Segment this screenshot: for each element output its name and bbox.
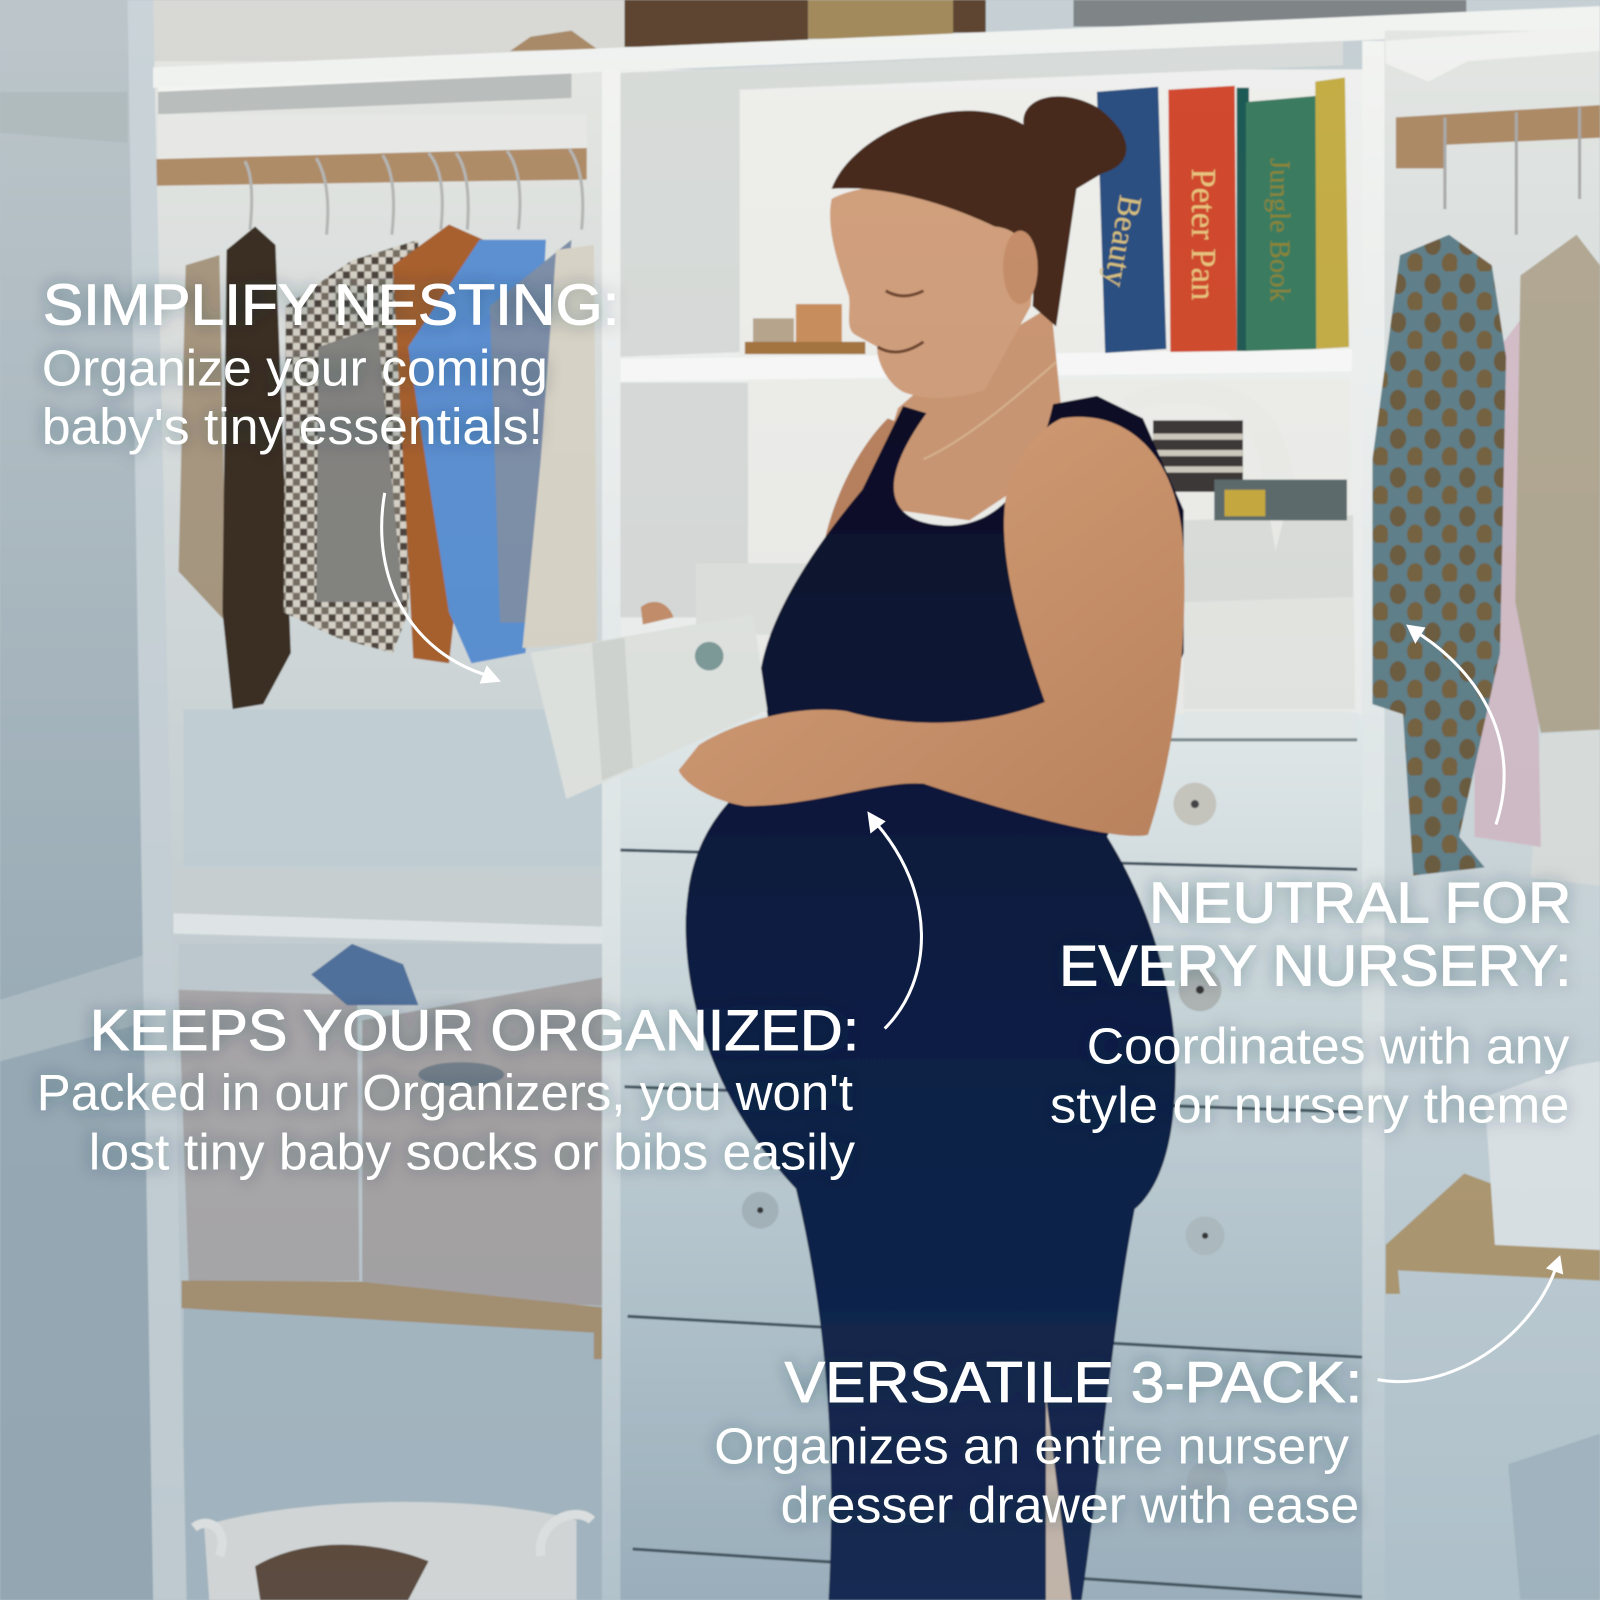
books: Peter Pan [1184, 168, 1223, 300]
lower wall and shelf [184, 709, 602, 867]
callout: neutral for every nursery: EVERY NURSERY: [1059, 935, 1571, 999]
callout: keeps your organized: lost tiny baby socks or bibs easily [89, 1123, 856, 1180]
hangers [245, 149, 583, 235]
body text: Organize your coming [42, 340, 548, 397]
arrow: to shelf bin [1378, 1255, 1563, 1382]
top shelf items [153, 0, 1600, 88]
books [1096, 78, 1349, 353]
tote basket [1122, 382, 1355, 709]
heading: KEEPS YOUR ORGANIZED: [90, 999, 859, 1063]
body text: Packed in our Organizers, you won't [37, 1064, 853, 1121]
hair [832, 96, 1126, 327]
right closet section [1372, 27, 1600, 1600]
felt bins [179, 990, 359, 1283]
left hand [641, 602, 673, 624]
toy train [745, 304, 865, 354]
far arm [822, 418, 913, 551]
callout: versatile 3-pack [714, 1351, 1362, 1533]
ear [1003, 231, 1038, 304]
dress [686, 396, 1184, 1600]
heading: NEUTRAL FOR [1149, 871, 1571, 935]
hanging clothes [179, 224, 597, 709]
callout: versatile 3-pack: dresser drawer with ease [781, 1476, 1359, 1533]
body text: Organizes an entire nursery [714, 1417, 1349, 1474]
head [830, 186, 1036, 398]
necklace [923, 362, 1056, 459]
callout: neutral for every nursery: style or nursery theme [1050, 1076, 1569, 1133]
dresser drawers [602, 41, 1385, 1600]
heading: VERSATILE 3-PACK: [785, 1351, 1362, 1415]
face features [878, 291, 923, 352]
callout: simplify nesting: baby's tiny essentials! [42, 398, 543, 455]
arrow: to felt bin [382, 493, 501, 684]
neck and chest [872, 306, 1061, 520]
near arm [679, 417, 1184, 836]
woman [641, 96, 1184, 1600]
callout: simplify nesting [42, 273, 619, 455]
books: Jungle Book [1263, 158, 1294, 302]
heading: SIMPLIFY NESTING: [43, 273, 619, 337]
left closet section [153, 0, 628, 1600]
arrow: to hanging clothes [1406, 624, 1504, 824]
wood shelf [182, 1281, 609, 1359]
rope basket [204, 1502, 577, 1600]
callout: keeps your organized [37, 999, 859, 1180]
felt bin held by woman [531, 614, 767, 799]
centre unit [602, 41, 1367, 1600]
body text: Coordinates with any [1087, 1017, 1570, 1074]
callout: neutral for every nursery [1050, 871, 1571, 1133]
left door [0, 0, 187, 1600]
arrow: to belly [867, 811, 921, 1029]
books: Beauty [1096, 192, 1148, 290]
